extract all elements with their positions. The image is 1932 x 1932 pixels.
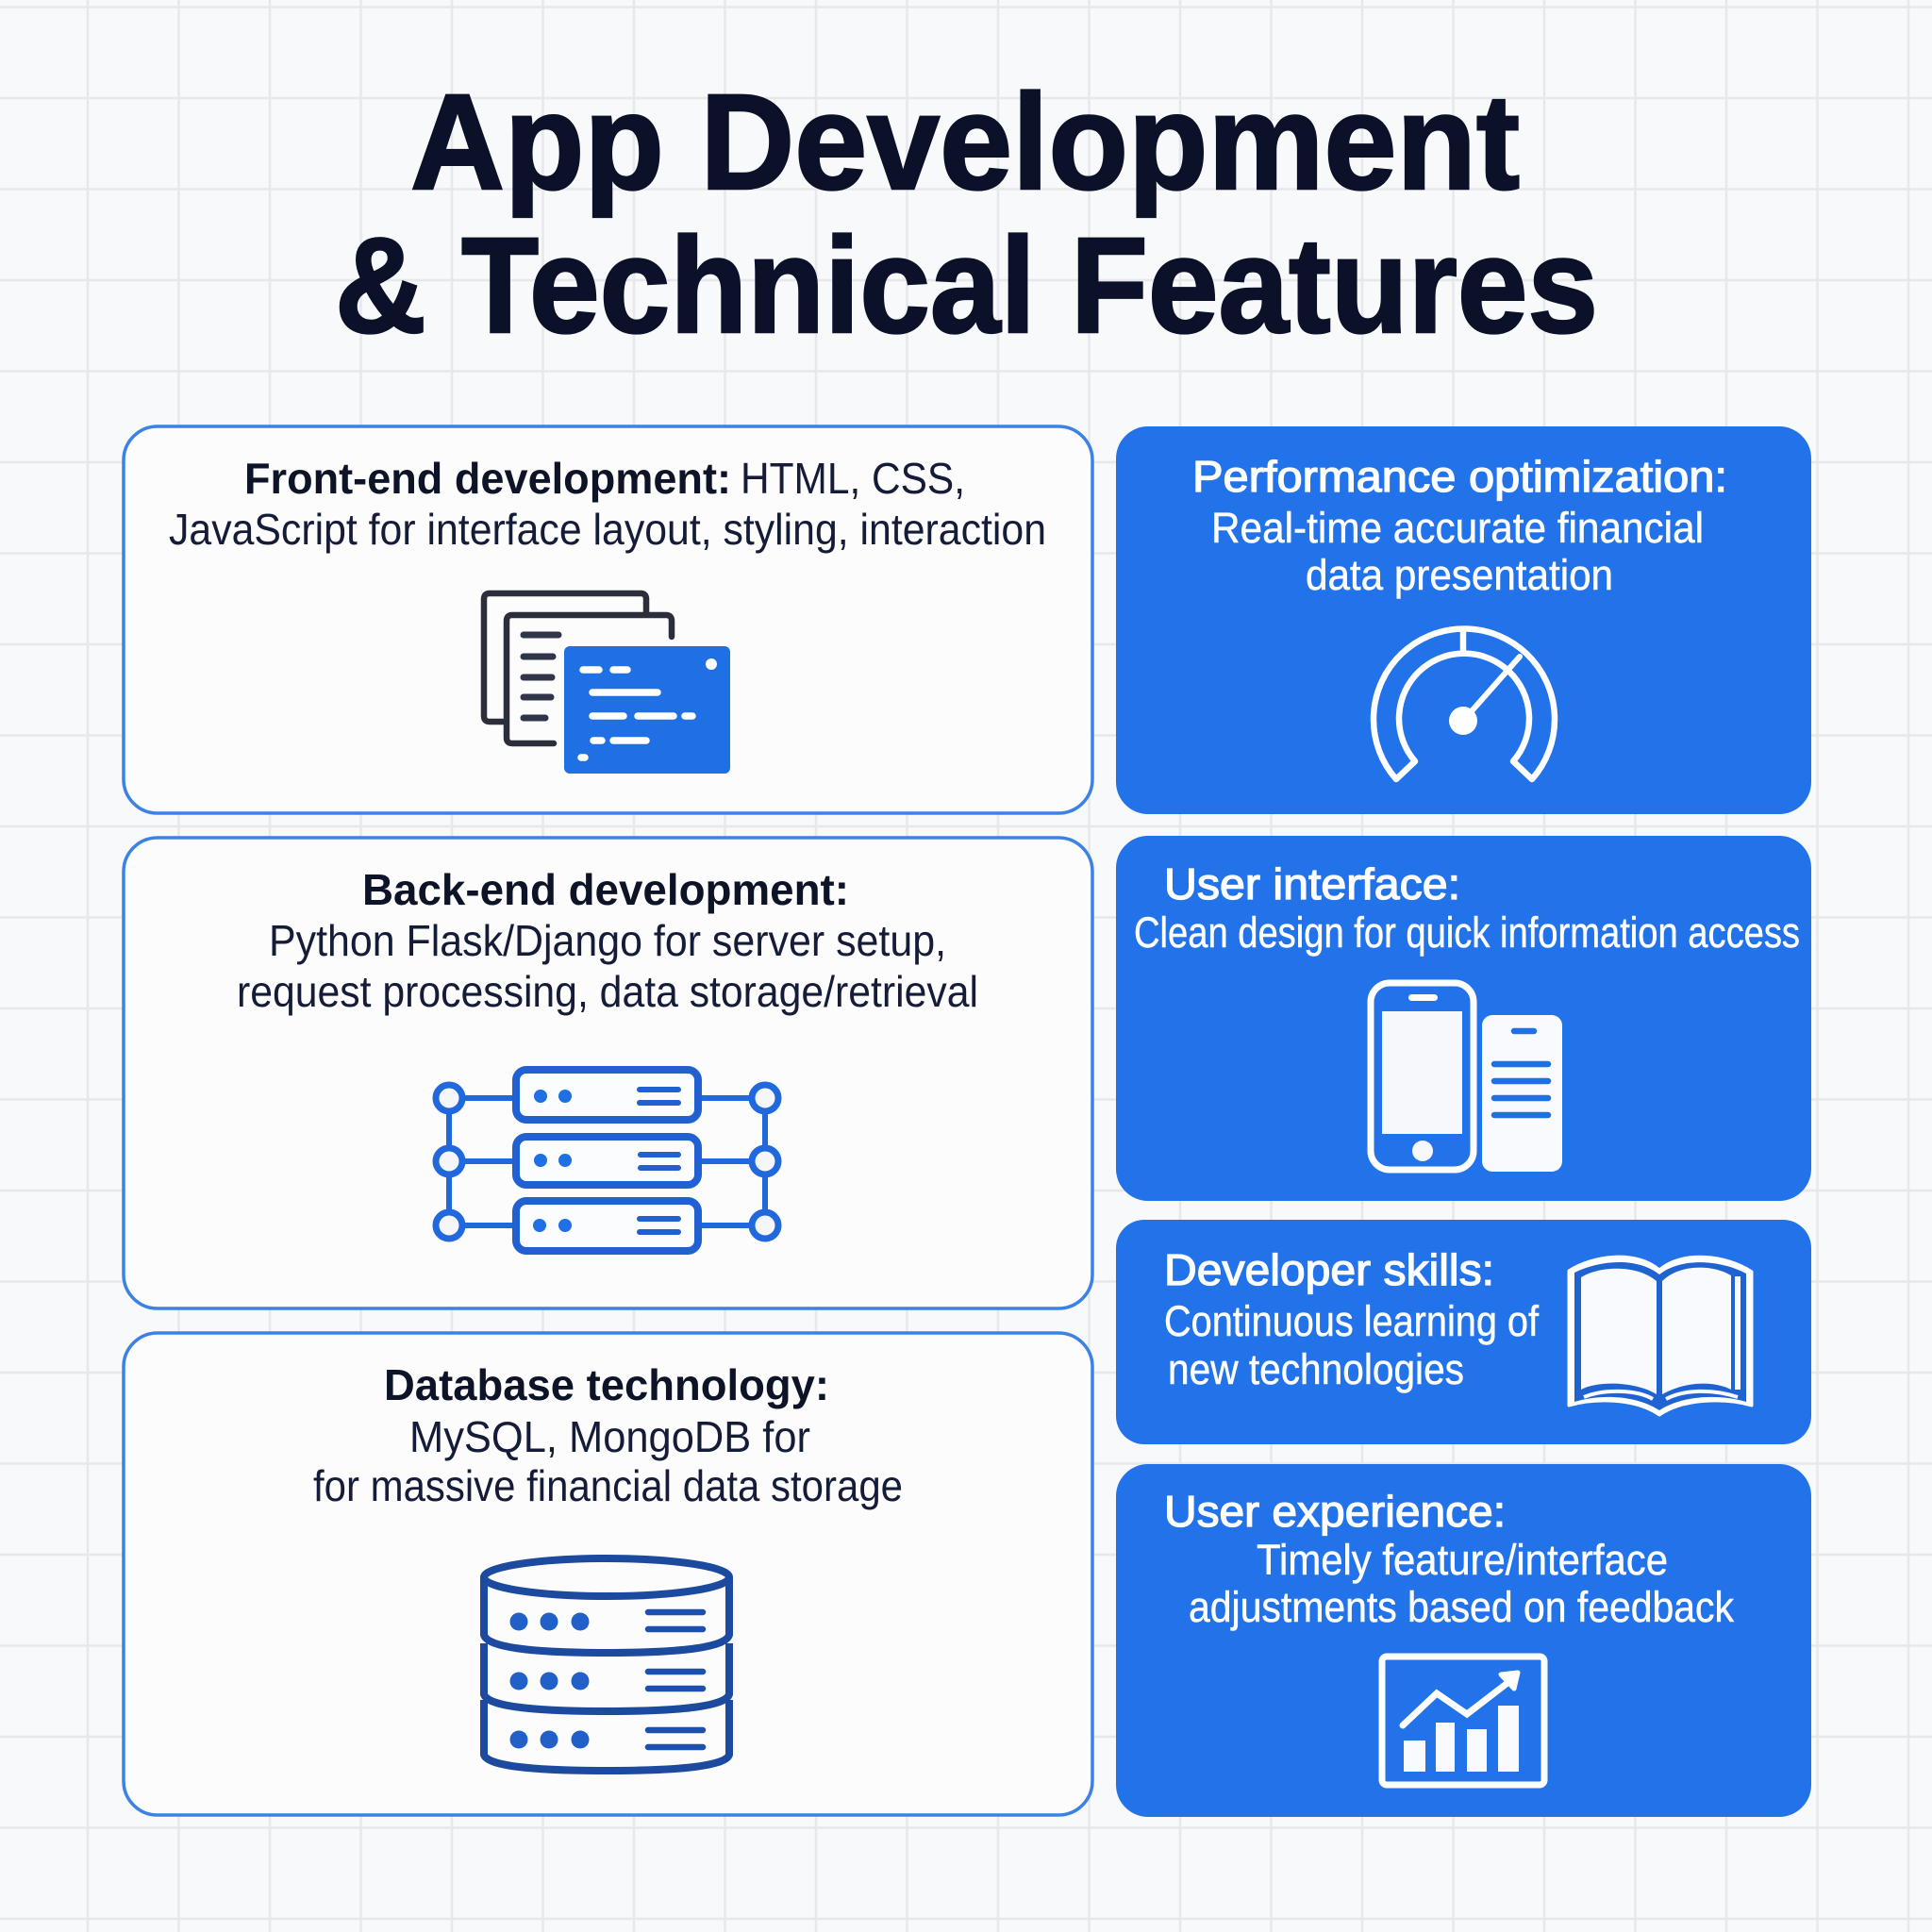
text: user interface: User interface: (1164, 859, 1460, 908)
text: database technology: for massive financial data storage (313, 1461, 903, 1510)
text: user interface: Clean design for quick information access (1134, 908, 1800, 957)
icon: speedometer gauge (1374, 629, 1555, 779)
text: performance optimization: Real-time accurate financial (1211, 504, 1704, 552)
text: database technology (313, 1360, 903, 1510)
panel: back-end development (124, 838, 1092, 1308)
icon: growth chart (1382, 1657, 1544, 1785)
panel: user experience (1116, 1464, 1811, 1817)
text: back-end development: Back-end development: (362, 865, 849, 914)
title: App Development (410, 66, 1520, 218)
text: user experience: User experience: (1164, 1487, 1506, 1536)
text: back-end development: Python Flask/Django for server setup, (269, 916, 946, 965)
icon: code windows (484, 593, 730, 774)
text: developer skills: Developer skills: (1164, 1245, 1494, 1294)
text: front-end development: HTML, CSS, (741, 454, 965, 503)
text: front-end development (169, 454, 1046, 554)
icon: mobile devices (1371, 983, 1562, 1172)
panel: developer skills (1116, 1220, 1811, 1444)
title: & Technical Features (335, 209, 1598, 361)
text: user experience (1164, 1487, 1734, 1631)
icon: open book (1569, 1257, 1752, 1415)
text: developer skills: Continuous learning of (1164, 1297, 1539, 1345)
text: front-end development: Front-end development: (244, 454, 731, 503)
text: user experience: Timely feature/interface (1257, 1536, 1668, 1584)
text: database technology: MySQL, MongoDB for (409, 1412, 810, 1461)
text: performance optimization: data presentation (1306, 551, 1613, 599)
panel: user interface (1116, 836, 1811, 1201)
icon: database stack (484, 1558, 729, 1771)
text: back-end development: request processing, data storage/retrieval (237, 967, 978, 1016)
text: back-end development (237, 865, 978, 1016)
text: database technology: Database technology: (384, 1360, 829, 1409)
title (335, 66, 1598, 361)
text: developer skills: new technologies (1168, 1345, 1464, 1393)
text: user experience: adjustments based on feedback (1189, 1583, 1734, 1631)
panel: database technology (124, 1333, 1092, 1815)
icon: server network (436, 1070, 778, 1251)
panel: performance optimization (1116, 426, 1811, 814)
text: performance optimization: Performance optimization: (1192, 452, 1727, 501)
text: performance optimization (1192, 452, 1727, 599)
text: front-end development: JavaScript for interface layout, styling, interaction (169, 505, 1046, 554)
text: user interface (1134, 859, 1800, 957)
panel: front-end development (124, 426, 1092, 813)
text: developer skills (1164, 1245, 1539, 1393)
